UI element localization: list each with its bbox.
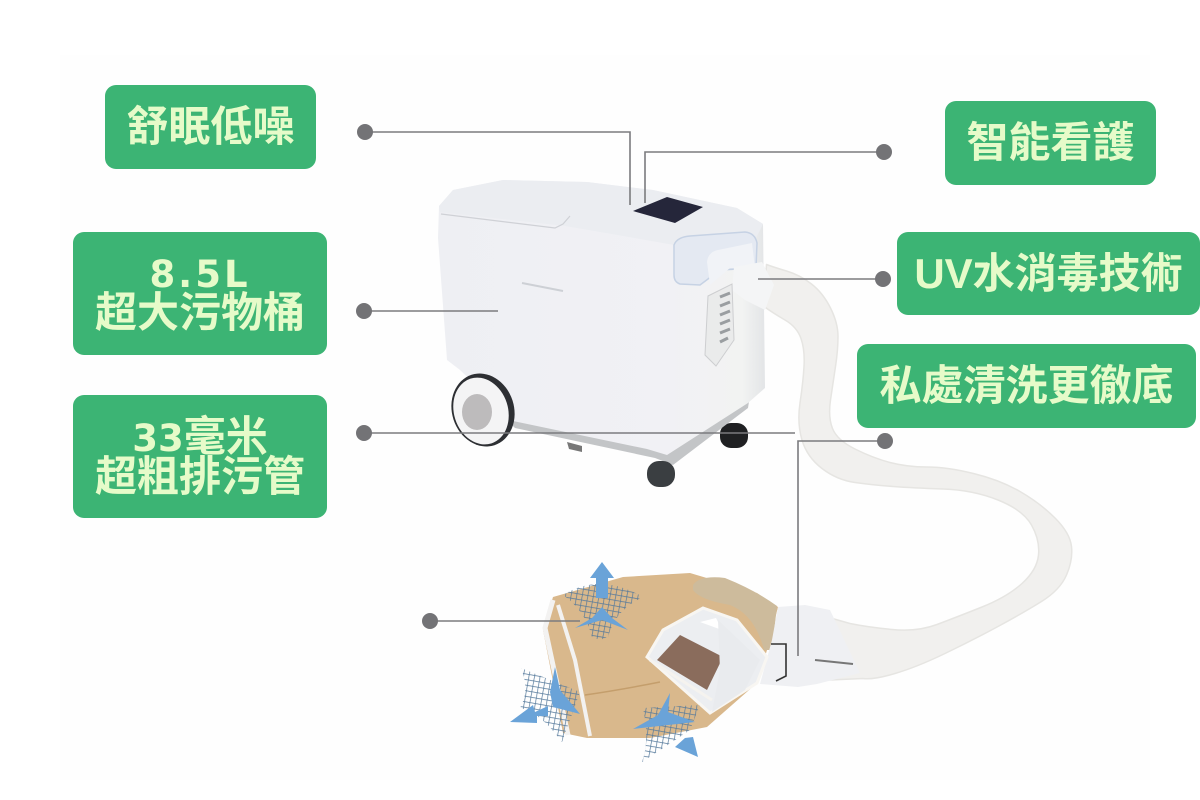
hose connector — [732, 262, 774, 310]
label: waste bucket: 超大污物桶 — [95, 288, 305, 336]
leader dots — [356, 124, 893, 629]
airflow arrows — [510, 562, 700, 762]
label: thorough cleaning — [857, 344, 1196, 428]
label: quiet sleep — [105, 85, 316, 169]
machine unit — [438, 180, 774, 487]
label: waste pipe: 33毫米 — [132, 412, 268, 460]
label: waste bucket — [73, 232, 327, 355]
machine body — [438, 180, 765, 455]
label: UV disinfection — [897, 232, 1200, 315]
label: smart care: 智能看護 — [966, 119, 1134, 166]
display panel — [633, 197, 703, 223]
side panel housing — [674, 232, 757, 285]
caster: rear right — [720, 423, 748, 448]
airflow: top — [563, 562, 643, 640]
remote control — [705, 284, 734, 366]
leader lines — [364, 132, 885, 656]
massage cap — [543, 573, 860, 738]
airflow: bottom — [633, 693, 700, 762]
wheels and casters — [442, 365, 675, 487]
label: waste pipe: 超粗排污管 — [95, 452, 305, 500]
hose — [764, 264, 1072, 680]
machine top lid — [439, 180, 763, 246]
label: smart care — [945, 101, 1156, 185]
cap grip — [693, 577, 777, 650]
label: quiet sleep: 舒眠低噪 — [126, 103, 294, 150]
airflow: left — [510, 667, 580, 742]
label: waste bucket: 8.5L — [149, 252, 251, 296]
cap shell — [543, 573, 778, 738]
label: thorough cleaning: 私處清洗更徹底 — [879, 362, 1174, 409]
label: waste pipe — [73, 395, 327, 518]
cap white trim — [545, 600, 568, 735]
cap opening — [647, 608, 767, 713]
machine base — [505, 395, 750, 465]
label: UV disinfection: UV水消毒技術 — [914, 250, 1183, 296]
brand mark — [522, 283, 563, 291]
connector sleeve — [760, 605, 860, 687]
